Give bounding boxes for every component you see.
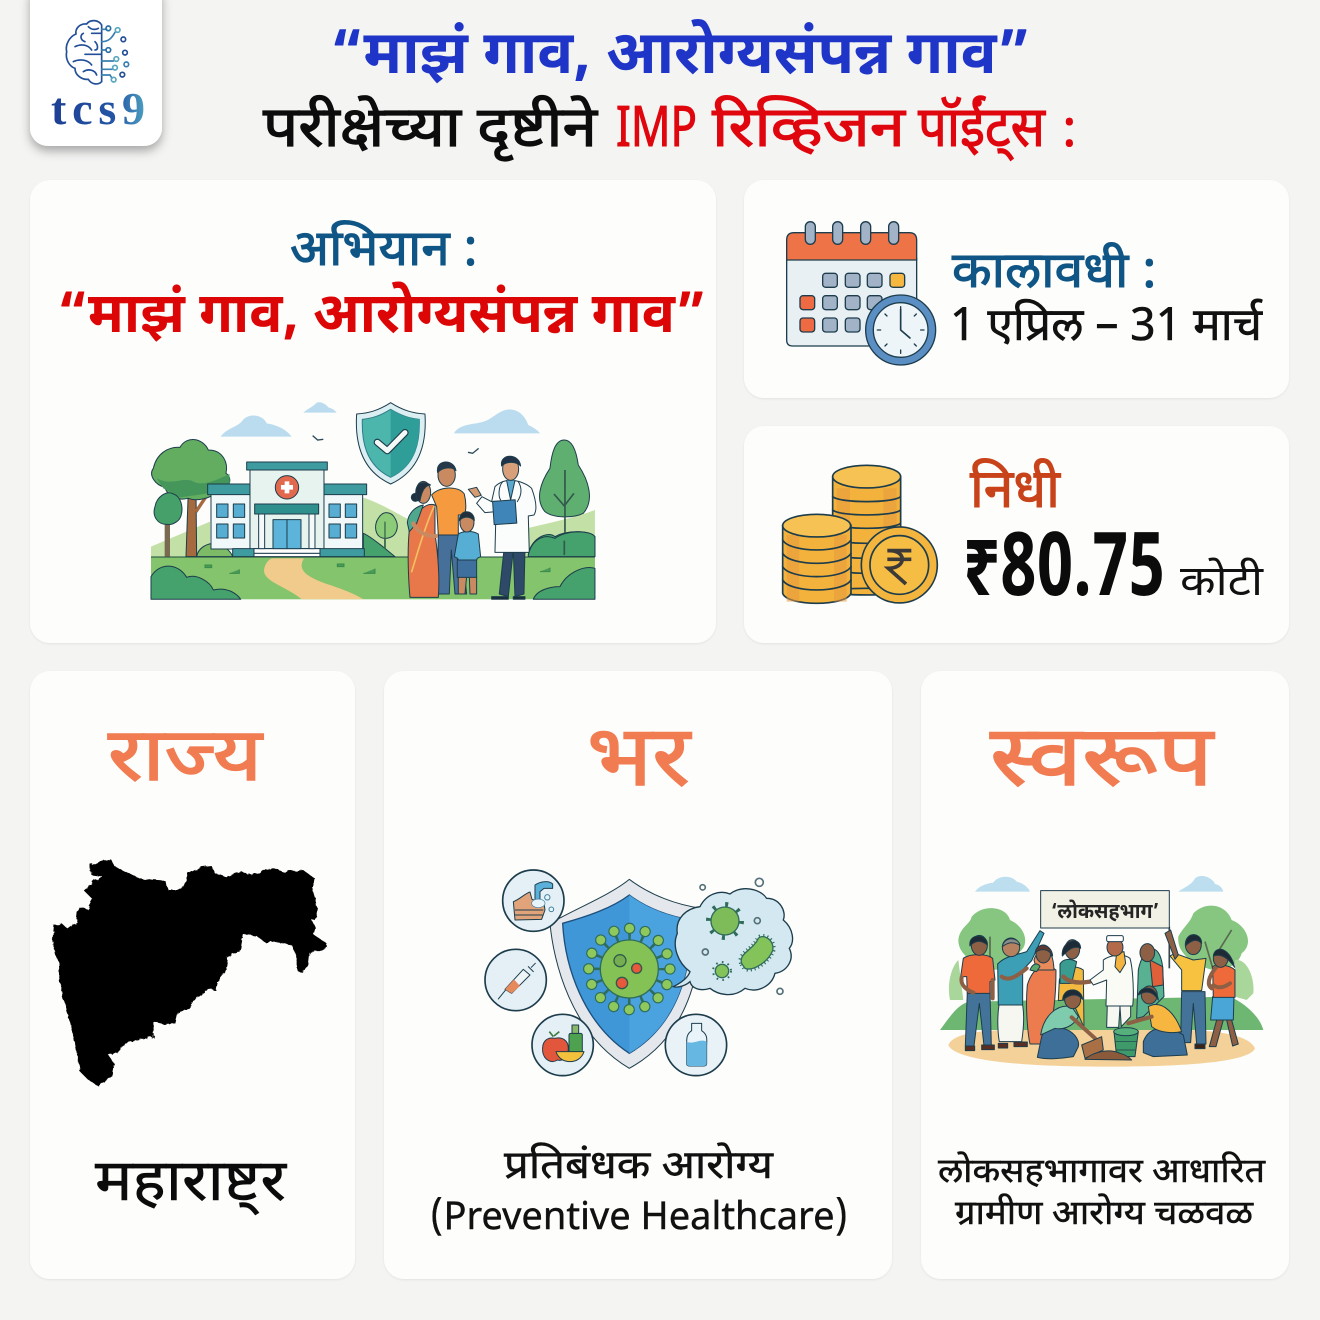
- icon: coin stacks: [783, 465, 937, 603]
- banner: [1041, 891, 1169, 968]
- clouds: [221, 402, 540, 437]
- bucket and soil: [1114, 1032, 1138, 1057]
- woman in saree: [407, 481, 439, 597]
- illustration: community participation: [940, 876, 1263, 1067]
- focus description line 2: (Preventive Healthcare): [430, 1195, 848, 1245]
- birds: [313, 436, 479, 453]
- orange saree woman: [1027, 966, 1056, 1044]
- logo wordmark: tcs9: [51, 83, 145, 134]
- state name: महाराष्ट्र: [95, 1148, 287, 1224]
- title line 2 black part: परीक्षेच्या दृष्टीने: [263, 95, 598, 169]
- path: [264, 558, 363, 599]
- title line 2 red part: :: [1062, 102, 1077, 167]
- illustration: village health scene: [151, 402, 595, 599]
- white kurta man: [1107, 1005, 1131, 1027]
- nature description line 1: लोकसहभागावर आधारित: [938, 1152, 1266, 1196]
- campaign label: अभियान :: [290, 220, 478, 286]
- title line 2 red part: IMP: [616, 96, 697, 169]
- title line 2 red part: [616, 95, 1077, 169]
- green saree woman: [1137, 949, 1164, 1018]
- shield: [356, 403, 425, 484]
- panel: duration: [744, 180, 1289, 398]
- panel: state: [30, 671, 355, 1279]
- map: Maharashtra silhouette: [53, 858, 327, 1086]
- duration label: कालावधी :: [952, 242, 1157, 308]
- yellow shirt man raising banner: [1181, 992, 1206, 1044]
- germ cloud: [673, 889, 793, 995]
- focus description line 1: प्रतिबंधक आरोग्य: [504, 1143, 775, 1194]
- title line 2 red part: पॉईंट्स: [918, 95, 1046, 169]
- right tree: [540, 440, 589, 517]
- funds label: निधी: [970, 458, 1061, 530]
- girl: [1209, 1020, 1238, 1047]
- icon: syringe: [485, 949, 546, 1011]
- left trees: [186, 490, 197, 557]
- title line 2 red part: रिव्हिजन: [712, 96, 906, 169]
- hospital: [208, 462, 367, 557]
- icon: circuit brain: [66, 21, 129, 84]
- shield: [550, 879, 702, 1068]
- people: [961, 930, 1238, 1060]
- logo card: tcs9: [30, 0, 162, 146]
- title line 1: “माझं गाव, आरोग्यसंपन्न गाव”: [330, 20, 1030, 98]
- panel: funds: [744, 426, 1289, 643]
- focus heading: भर: [587, 711, 692, 820]
- nature description line 2: ग्रामीण आरोग्य चळवळ: [955, 1194, 1254, 1238]
- man: [432, 462, 467, 594]
- child: [454, 512, 481, 594]
- yellow saree woman: [1058, 967, 1084, 1027]
- nature heading: स्वरूप: [990, 711, 1214, 820]
- virus: [596, 936, 663, 1002]
- illustration: preventive healthcare shield: [485, 870, 793, 1076]
- panel: nature: [921, 671, 1289, 1279]
- kneeling man left: [1037, 1027, 1079, 1059]
- panel: campaign: [30, 180, 716, 643]
- kneeling man right: [1143, 1028, 1187, 1057]
- state heading: राज्य: [108, 715, 263, 811]
- banner: ‘लोकसहभाग’: [1051, 899, 1159, 927]
- background clouds and trees: [975, 876, 1223, 892]
- small tree: [382, 530, 387, 548]
- campaign name: “माझं गाव, आरोग्यसंपन्न गाव”: [57, 282, 706, 355]
- duration dates: 1 एप्रिल – 31 मार्च: [950, 298, 1263, 359]
- orange shirt man: [965, 992, 991, 1046]
- icon: healthy food: [532, 1014, 593, 1076]
- funds amount: ₹80.75: [963, 516, 1165, 631]
- title: [263, 20, 1077, 169]
- icon: calendar with clock: [787, 222, 936, 365]
- icon: hand washing: [503, 870, 564, 931]
- panel: focus: [384, 671, 892, 1279]
- doctor: [468, 456, 536, 599]
- icon: water bottle: [665, 1014, 727, 1076]
- old man blue: [998, 1005, 1024, 1042]
- funds unit: कोटी: [1180, 558, 1264, 613]
